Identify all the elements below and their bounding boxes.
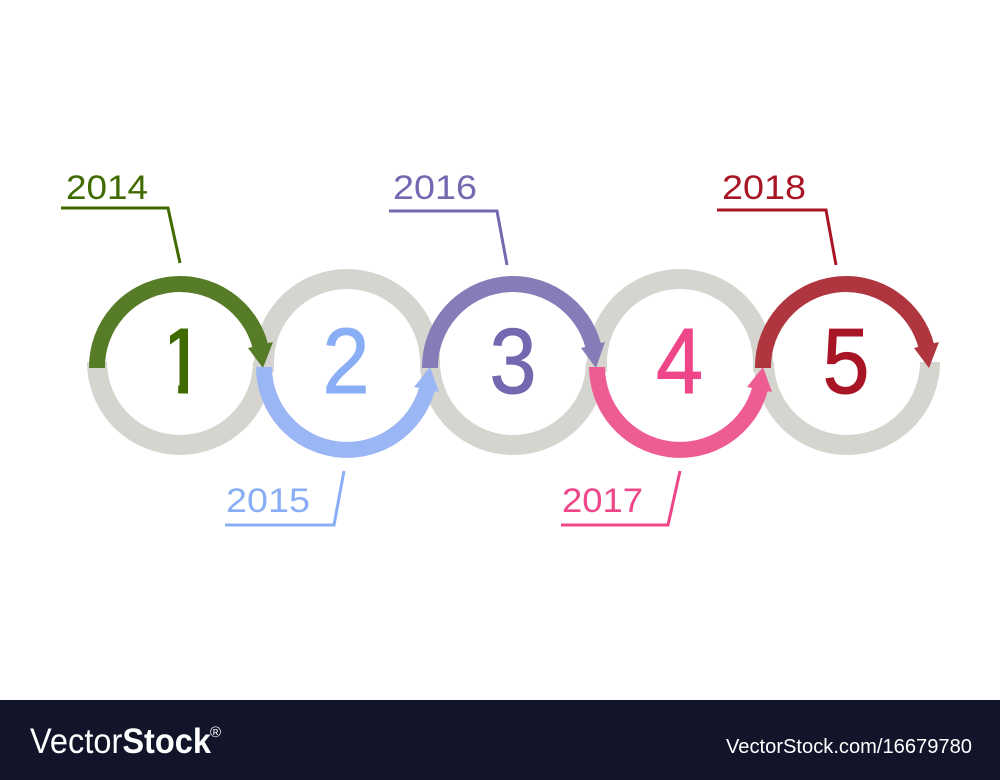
leader line 2017 xyxy=(561,471,680,525)
leader line 2014 xyxy=(61,208,180,263)
year 2016: 2016 xyxy=(393,169,477,207)
registered mark: ® xyxy=(210,724,221,741)
year 2018: 2018 xyxy=(722,169,806,207)
leader line 2015 xyxy=(225,471,344,525)
arrow arc 1 xyxy=(97,284,273,368)
footer logo: VectorStock xyxy=(30,722,211,761)
number 3: 3 xyxy=(490,309,536,413)
infographic canvas xyxy=(0,175,1000,780)
number 4: 4 xyxy=(656,309,703,413)
number 2: 2 xyxy=(322,309,370,413)
footer url: VectorStock.com/16679780 xyxy=(726,736,972,758)
step 1: 2014 xyxy=(61,175,273,394)
step 4: 2017 xyxy=(561,309,772,525)
leader line 2018 xyxy=(717,210,836,265)
step 2: 2015 xyxy=(225,309,439,525)
arrow arc 4 xyxy=(597,367,772,450)
grey rings xyxy=(97,279,930,445)
step 3: 2016 xyxy=(389,169,605,413)
arrow arc 2 xyxy=(264,367,439,450)
number 5: 5 xyxy=(822,309,870,413)
leader line 2016 xyxy=(389,211,507,265)
year 2015: 2015 xyxy=(226,482,310,520)
number 1: 1 xyxy=(157,309,208,413)
year 2014: 2014 xyxy=(66,169,148,207)
footer bar xyxy=(0,700,1000,780)
arrow arc 5 xyxy=(763,284,939,368)
year 2017: 2017 xyxy=(562,482,643,520)
arrow arc 3 xyxy=(430,284,605,368)
step 5: 2018 xyxy=(717,169,939,413)
